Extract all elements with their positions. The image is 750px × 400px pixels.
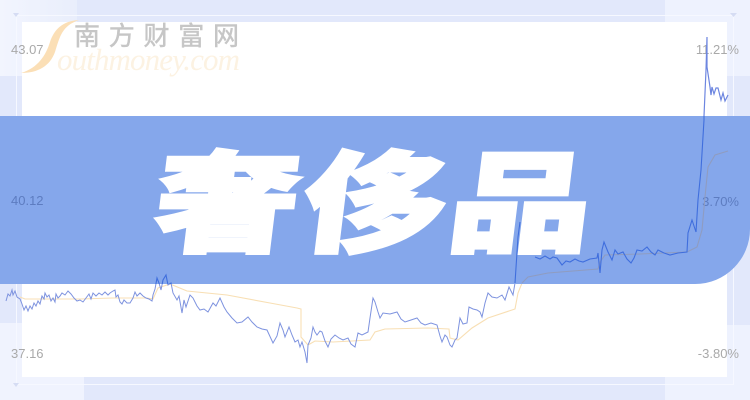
banner <box>0 116 750 284</box>
logo Chinese name: 南方财富网 <box>74 16 239 53</box>
logo Latin name: outhmoney.com <box>57 42 240 77</box>
right axis labels <box>696 42 739 361</box>
logo watermark <box>21 16 240 77</box>
price spike tail <box>704 37 728 116</box>
left axis labels <box>11 42 44 361</box>
title character 2: 侈 <box>295 116 458 275</box>
title character 3: 品 <box>441 116 604 275</box>
title <box>147 116 604 275</box>
left axis labels: 43.07 <box>11 42 44 57</box>
price line on banner <box>155 116 704 293</box>
title character 1: 奢 <box>147 116 310 275</box>
right axis labels: -3.80% <box>698 346 739 361</box>
left middle axis value on banner: 40.12 <box>11 193 44 208</box>
right axis labels: 11.21% <box>696 42 739 57</box>
average line on banner <box>522 151 728 283</box>
right middle axis value on banner: 3.70% <box>702 194 739 209</box>
left axis labels: 37.16 <box>11 346 44 361</box>
logo swoosh S <box>21 20 79 73</box>
price line <box>6 222 520 363</box>
average price line <box>20 283 522 345</box>
